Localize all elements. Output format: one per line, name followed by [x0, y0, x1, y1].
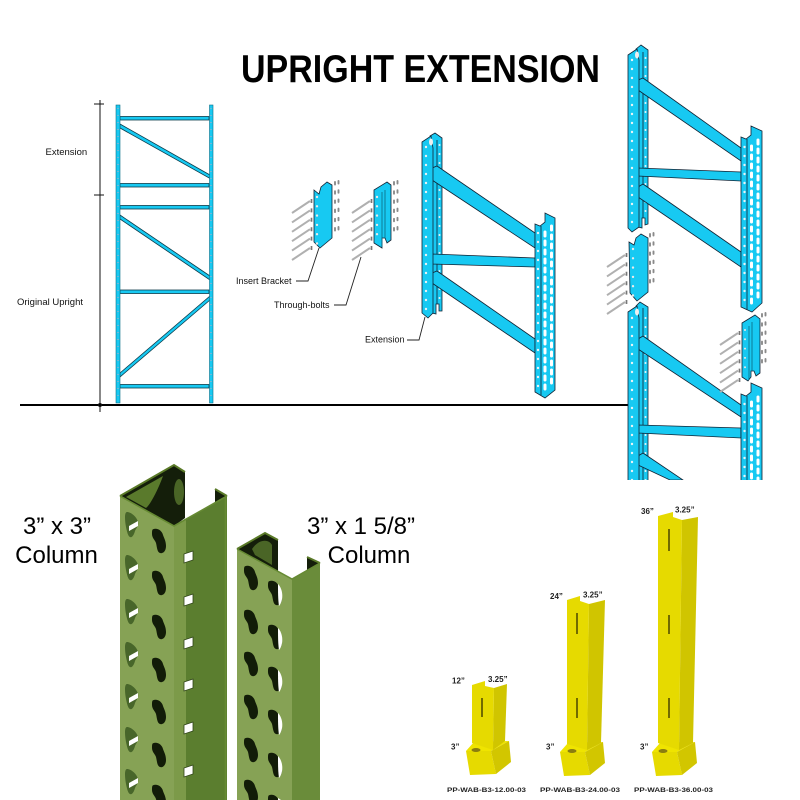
dimension line [94, 100, 104, 412]
label: 3 x 3 column: 3” x 3” [23, 513, 91, 540]
12 inch yellow protector [447, 675, 526, 794]
dimension labels: 24” [550, 592, 563, 601]
dimension labels [546, 590, 603, 752]
label: 3 x 3 column [15, 513, 98, 569]
36 inch yellow protector [634, 506, 713, 794]
dimension labels: 3” [451, 742, 459, 752]
insert bracket [292, 181, 338, 260]
dimension labels: 3.25” [583, 590, 603, 600]
column faces [237, 549, 292, 800]
part number: PP-WAB-B3-24.00-03 [540, 787, 620, 794]
exploded frame: upper section [628, 45, 762, 312]
dimension labels [640, 506, 695, 752]
dimension labels: 12” [452, 676, 465, 686]
label: original upright: Original Upright [17, 297, 83, 308]
frame posts [116, 105, 213, 403]
exploded frame: right insert bracket [720, 313, 766, 392]
callout: extension: Extension [365, 334, 405, 344]
channel interior [120, 465, 185, 526]
part number: PP-WAB-B3-36.00-03 [634, 787, 713, 794]
part number: PP-WAB-B3-12.00-03 [447, 787, 526, 794]
label: 3 x 3 column: Column [15, 542, 98, 569]
3 x 3 green column [120, 465, 227, 800]
white cut-throughs [278, 584, 282, 800]
label: 3 x 1 5/8 column: Column [328, 542, 410, 569]
right hole column [268, 581, 282, 800]
callout: through-bolts: Through-bolts [274, 300, 330, 310]
exploded frame: left insert bracket [607, 233, 654, 314]
through-bolted bracket [352, 181, 398, 260]
24 inch yellow protector [540, 590, 620, 794]
callout leaders [296, 248, 425, 340]
dimension labels: 3.25” [675, 506, 695, 514]
dimension labels: 3” [640, 742, 648, 752]
label: 3 x 1 5/8 column: 3” x 1 5/8” [307, 513, 415, 540]
left hole column [125, 512, 138, 794]
front elevation upright [17, 100, 213, 412]
side square slots [184, 551, 193, 777]
callout: insert bracket: Insert Bracket [236, 276, 292, 286]
ground line [20, 404, 628, 406]
dimension labels: 36” [641, 507, 654, 516]
left hole slots [129, 521, 138, 788]
exploded frame: lower section [628, 302, 762, 490]
3 x 1 5/8 green column [237, 533, 320, 800]
dimension labels [451, 675, 508, 752]
column faces [120, 496, 174, 800]
centre hole column [152, 529, 166, 800]
label: extension: Extension [46, 147, 87, 158]
label: 3 x 1 5/8 column [307, 513, 415, 569]
frame braces [120, 116, 210, 388]
dimension labels: 3” [546, 742, 554, 752]
channel interior [237, 533, 292, 579]
extension frame [422, 133, 555, 398]
left hole column [244, 566, 258, 800]
dimension labels: 3.25” [488, 675, 508, 684]
title: UPRIGHT EXTENSION [241, 48, 600, 91]
